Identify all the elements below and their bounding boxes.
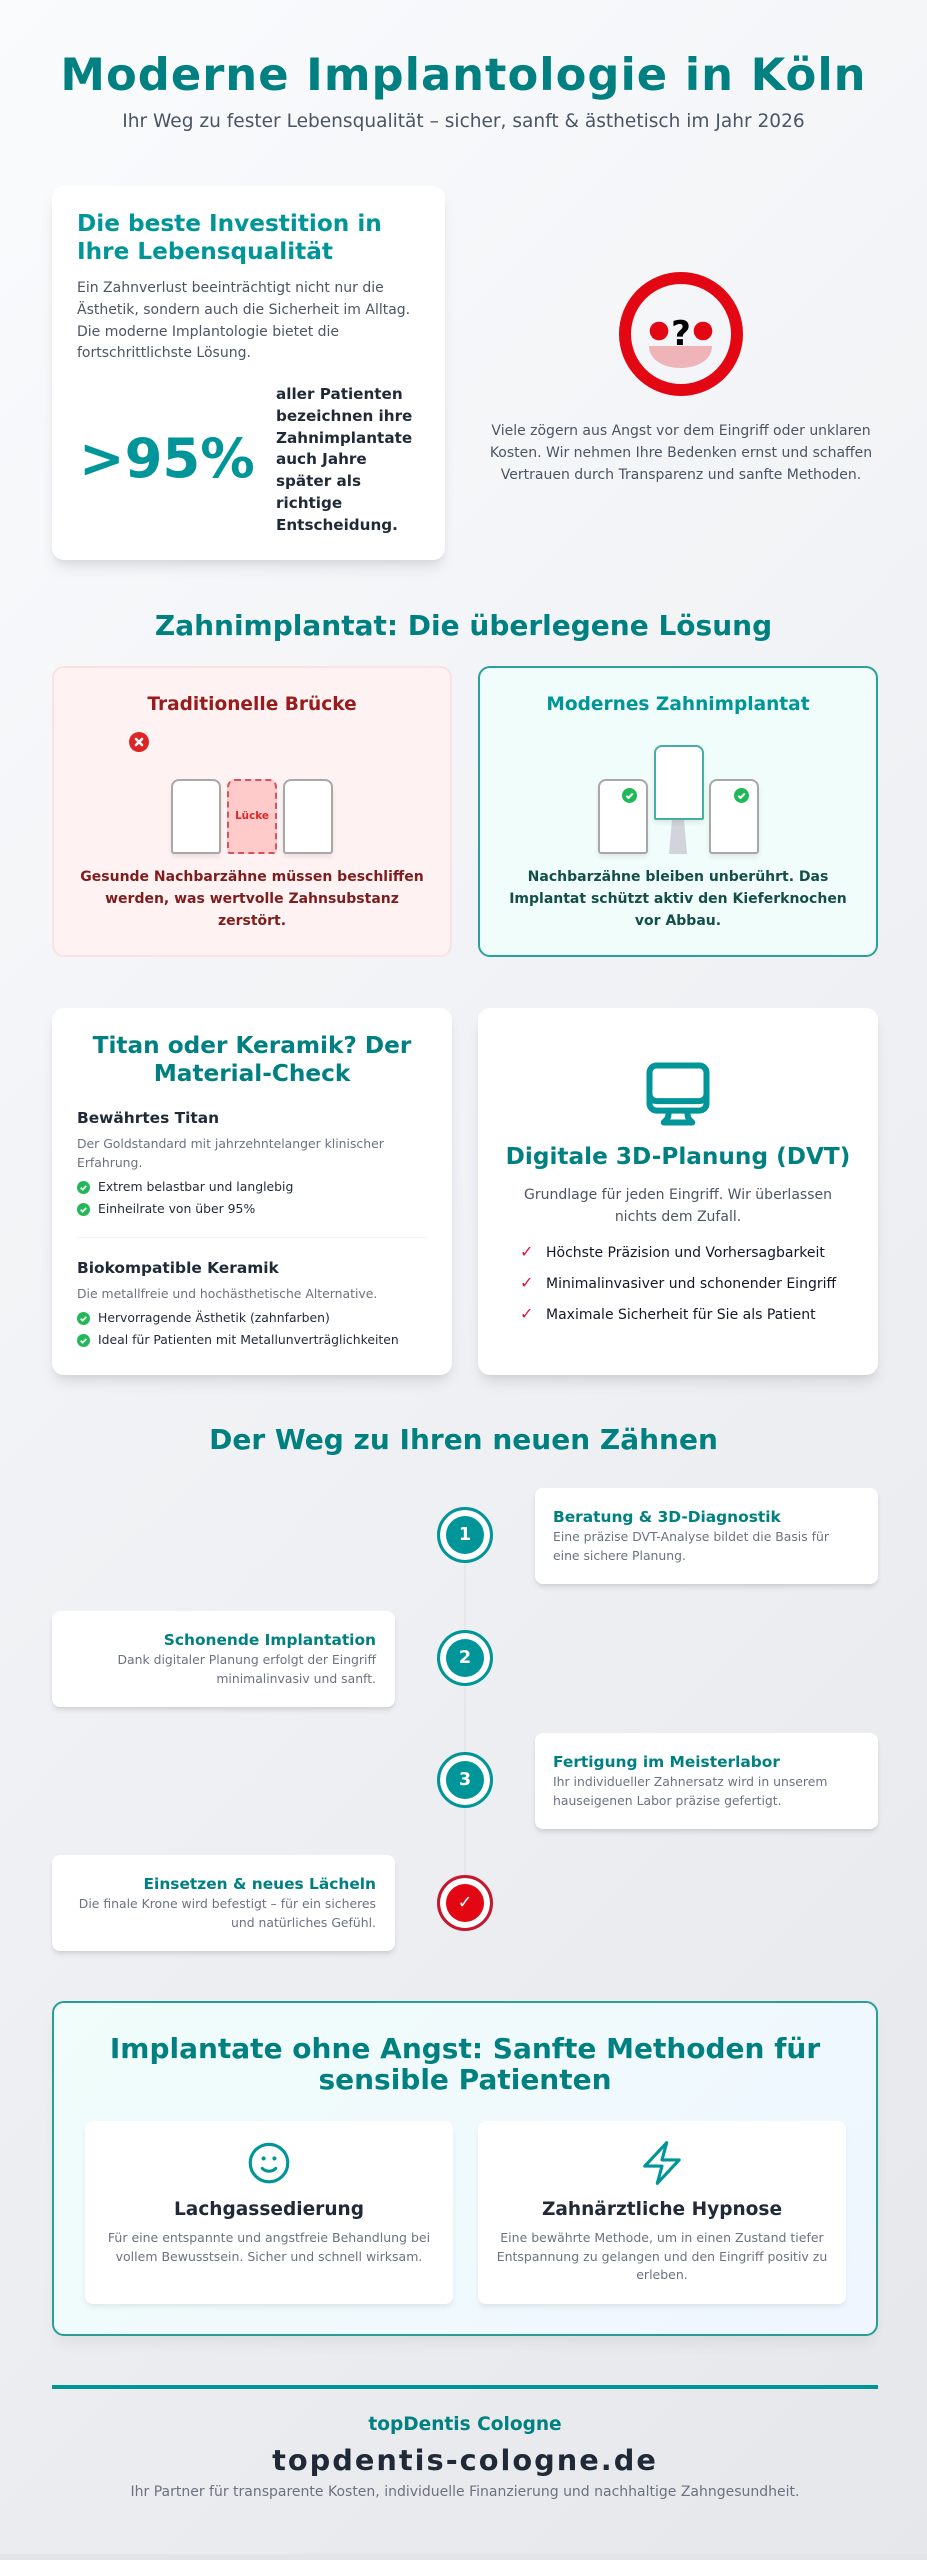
heading: investition: Ihre Lebensqualität bbox=[77, 238, 333, 265]
step 4 text: Die finale Krone wird befestigt – für ein sicheres bbox=[79, 1896, 376, 1911]
icon: worried face with question mark: ? bbox=[671, 314, 691, 354]
text: bridge: werden, was wertvolle Zahnsubstanz bbox=[105, 891, 399, 907]
heading: gentle methods bbox=[110, 2032, 820, 2096]
text: hypnosis: erleben. bbox=[636, 2267, 688, 2282]
icon: check right bbox=[734, 788, 749, 803]
text: hesitation: Vertrauen durch Transparenz und sanfte Methoden. bbox=[501, 467, 861, 483]
heading: titan: Bewährtes Titan bbox=[77, 1109, 219, 1127]
text: planning bbox=[524, 1187, 832, 1225]
text: titan: Erfahrung. bbox=[77, 1155, 142, 1170]
heading: material: Titan oder Keramik? Der bbox=[93, 1032, 411, 1059]
text: hesitation: Viele zögern aus Angst vor dem Eingriff oder unklaren bbox=[491, 423, 871, 439]
text: implant: Nachbarzähne bleiben unberührt. Das bbox=[528, 869, 828, 885]
text: planning: nichts dem Zufall. bbox=[615, 1209, 741, 1225]
panel: material check bbox=[52, 1008, 452, 1375]
text: nitrous oxide: Für eine entspannte und angstfreie Behandlung bei bbox=[108, 2230, 430, 2245]
heading: implant: Modernes Zahnimplantat bbox=[546, 694, 810, 715]
benefit: Maximale Sicherheit für Sie als Patient bbox=[546, 1307, 816, 1323]
step 4 title: Einsetzen & neues Lächeln bbox=[144, 1875, 376, 1893]
stat description: auch Jahre bbox=[276, 450, 367, 468]
text: investition: Die moderne Implantologie bietet die bbox=[77, 324, 339, 340]
step 1 text bbox=[553, 1529, 829, 1563]
text: titan: Der Goldstandard mit jahrzehntelanger klinischer bbox=[77, 1136, 384, 1151]
step 3 text bbox=[553, 1774, 827, 1808]
list item: Hervorragende Ästhetik (zahnfarben) bbox=[98, 1310, 330, 1325]
step 2 card bbox=[52, 1611, 395, 1707]
heading: comparison: Zahnimplantat: Die überlegene Lösung bbox=[155, 609, 772, 642]
step 4 card bbox=[52, 1855, 395, 1951]
heading: investition: Die beste Investition in bbox=[77, 210, 382, 237]
panel: digital planning bbox=[478, 1008, 878, 1375]
tooth right bbox=[709, 779, 759, 854]
list item: Einheilrate von über 95% bbox=[98, 1201, 255, 1216]
text: planning: Grundlage für jeden Eingriff. Wir überlassen bbox=[524, 1187, 832, 1203]
step 1 card bbox=[535, 1488, 878, 1584]
heading: material: Material-Check bbox=[154, 1060, 350, 1087]
implant post bbox=[669, 820, 687, 854]
heading: bridge: Traditionelle Brücke bbox=[147, 694, 357, 715]
block: keramik bbox=[77, 1259, 399, 1347]
heading: gentle methods: sensible Patienten bbox=[318, 2063, 612, 2096]
text: bridge: zerstört. bbox=[218, 913, 286, 929]
title: nitrous oxide: Lachgassedierung bbox=[174, 2199, 364, 2220]
text: hypnosis bbox=[497, 2230, 827, 2282]
step 3 text: hauseigenen Labor präzise gefertigt. bbox=[553, 1793, 782, 1808]
text: hypnosis: Entspannung zu gelangen und den Eingriff positiv zu bbox=[497, 2249, 827, 2264]
text: nitrous oxide bbox=[108, 2230, 430, 2264]
benefit: Höchste Präzision und Vorhersagbarkeit bbox=[546, 1245, 825, 1261]
step 1 text: Eine präzise DVT-Analyse bildet die Basis für bbox=[553, 1529, 829, 1544]
text: implant bbox=[509, 869, 847, 929]
stat description: aller Patienten bbox=[276, 385, 403, 403]
footer brand: topDentis Cologne bbox=[368, 2414, 562, 2435]
icon: smile bbox=[248, 2142, 290, 2184]
text: keramik: Die metallfreie und hochästhetische Alternative. bbox=[77, 1286, 377, 1301]
tooth right bbox=[283, 779, 333, 854]
gap: Lücke bbox=[235, 810, 269, 822]
benefit: ✓ bbox=[520, 1242, 533, 1261]
list item: Extrem belastbar und langlebig bbox=[98, 1179, 293, 1194]
diagram: teeth with gap bbox=[170, 779, 334, 858]
list: planning benefits bbox=[520, 1242, 836, 1323]
text: implant: vor Abbau. bbox=[635, 913, 721, 929]
icon: worried face with question mark bbox=[619, 272, 743, 396]
text: implant: Implantat schützt aktiv den Kieferknochen bbox=[509, 891, 847, 907]
diagram: implant between healthy teeth bbox=[598, 745, 760, 858]
step 1 number bbox=[437, 1507, 493, 1563]
text: investition: Ein Zahnverlust beeinträchtigt nicht nur die bbox=[77, 280, 384, 296]
step 2 text bbox=[118, 1652, 376, 1686]
step 1 title: Beratung & 3D-Diagnostik bbox=[553, 1508, 781, 1526]
step 1 number: 1 bbox=[459, 1525, 471, 1545]
text: investition: Ästhetik, sondern auch die Sicherheit im Alltag. bbox=[77, 302, 410, 318]
timeline: process steps bbox=[51, 1488, 879, 1955]
footer bbox=[52, 2385, 878, 2500]
text: titan bbox=[77, 1136, 384, 1170]
stat description: später als bbox=[276, 472, 361, 490]
step 4 text bbox=[79, 1896, 376, 1930]
step 4 check bbox=[437, 1875, 493, 1931]
benefit: ✓ bbox=[520, 1273, 533, 1292]
icon: x mark bbox=[129, 732, 149, 752]
panel: modern implant bbox=[478, 666, 878, 957]
step 4 check: ✓ bbox=[458, 1893, 472, 1913]
list item: Ideal für Patienten mit Metallunverträglichkeiten bbox=[98, 1332, 399, 1347]
step 2 number: 2 bbox=[459, 1648, 471, 1668]
heading: material bbox=[92, 1032, 412, 1087]
text: hypnosis: Eine bewährte Methode, um in einen Zustand tiefer bbox=[500, 2230, 824, 2245]
icon: bolt bbox=[643, 2141, 681, 2185]
step 3 text: Ihr individueller Zahnersatz wird in unserem bbox=[553, 1774, 827, 1789]
panel: investition bbox=[52, 186, 445, 560]
icon: monitor bbox=[646, 1062, 710, 1126]
stat description: richtige bbox=[276, 494, 342, 512]
panel: gentle methods bbox=[52, 2001, 878, 2336]
tooth left bbox=[598, 779, 648, 854]
step 4 text: und natürliches Gefühl. bbox=[231, 1915, 376, 1930]
step 3 title: Fertigung im Meisterlabor bbox=[553, 1753, 780, 1771]
card: hypnosis bbox=[478, 2121, 846, 2304]
step 2 title: Schonende Implantation bbox=[164, 1631, 376, 1649]
heading: planning: Digitale 3D-Planung (DVT) bbox=[506, 1143, 850, 1170]
step 3 number: 3 bbox=[459, 1770, 471, 1790]
heading: process: Der Weg zu Ihren neuen Zähnen bbox=[209, 1423, 718, 1456]
heading: keramik: Biokompatible Keramik bbox=[77, 1259, 279, 1277]
benefit: ✓ bbox=[520, 1304, 533, 1323]
text: investition bbox=[77, 280, 410, 361]
stat: 95 percent: >95% bbox=[79, 427, 255, 490]
tooth left bbox=[171, 779, 221, 854]
footer url: topdentis-cologne.de bbox=[272, 2443, 658, 2477]
text: nitrous oxide: vollem Bewusstsein. Sicher und schnell wirksam. bbox=[116, 2249, 422, 2264]
stat description: Entscheidung. bbox=[276, 516, 398, 534]
implant crown bbox=[654, 745, 704, 820]
title: hypnosis: Zahnärztliche Hypnose bbox=[542, 2199, 782, 2220]
title: Moderne Implantologie in Köln bbox=[60, 48, 867, 101]
footer note: Ihr Partner für transparente Kosten, individuelle Finanzierung und nachhaltige Zahngesundheit. bbox=[130, 2484, 800, 2500]
step 2 number bbox=[437, 1630, 493, 1686]
panel: traditional bridge bbox=[52, 666, 452, 957]
benefit: Minimalinvasiver und schonender Eingriff bbox=[546, 1276, 836, 1292]
text: bridge: Gesunde Nachbarzähne müssen beschliffen bbox=[80, 869, 424, 885]
subtitle: Ihr Weg zu fester Lebensqualität – sicher, sanft & ästhetisch im Jahr 2026 bbox=[122, 111, 805, 132]
icon: check left bbox=[622, 788, 637, 803]
stat description: bezeichnen ihre bbox=[276, 407, 412, 425]
heading: investition bbox=[77, 210, 382, 265]
stat description bbox=[276, 385, 412, 534]
step 3 card bbox=[535, 1733, 878, 1829]
step 3 number bbox=[437, 1752, 493, 1808]
heading: gentle methods: Implantate ohne Angst: Sanfte Methoden für bbox=[110, 2032, 820, 2065]
stat description: Zahnimplantate bbox=[276, 429, 412, 447]
text: hesitation: Kosten. Wir nehmen Ihre Bedenken ernst und schaffen bbox=[490, 445, 872, 461]
text: bridge bbox=[80, 869, 424, 929]
text: hesitation bbox=[490, 423, 872, 483]
step 2 text: minimalinvasiv und sanft. bbox=[216, 1671, 376, 1686]
text: investition: fortschrittlichste Lösung. bbox=[77, 345, 251, 361]
gap bbox=[227, 779, 277, 854]
step 1 text: eine sichere Planung. bbox=[553, 1548, 686, 1563]
card: nitrous oxide bbox=[85, 2121, 453, 2304]
step 2 text: Dank digitaler Planung erfolgt der Eingriff bbox=[118, 1652, 376, 1667]
block: titan bbox=[77, 1109, 384, 1216]
